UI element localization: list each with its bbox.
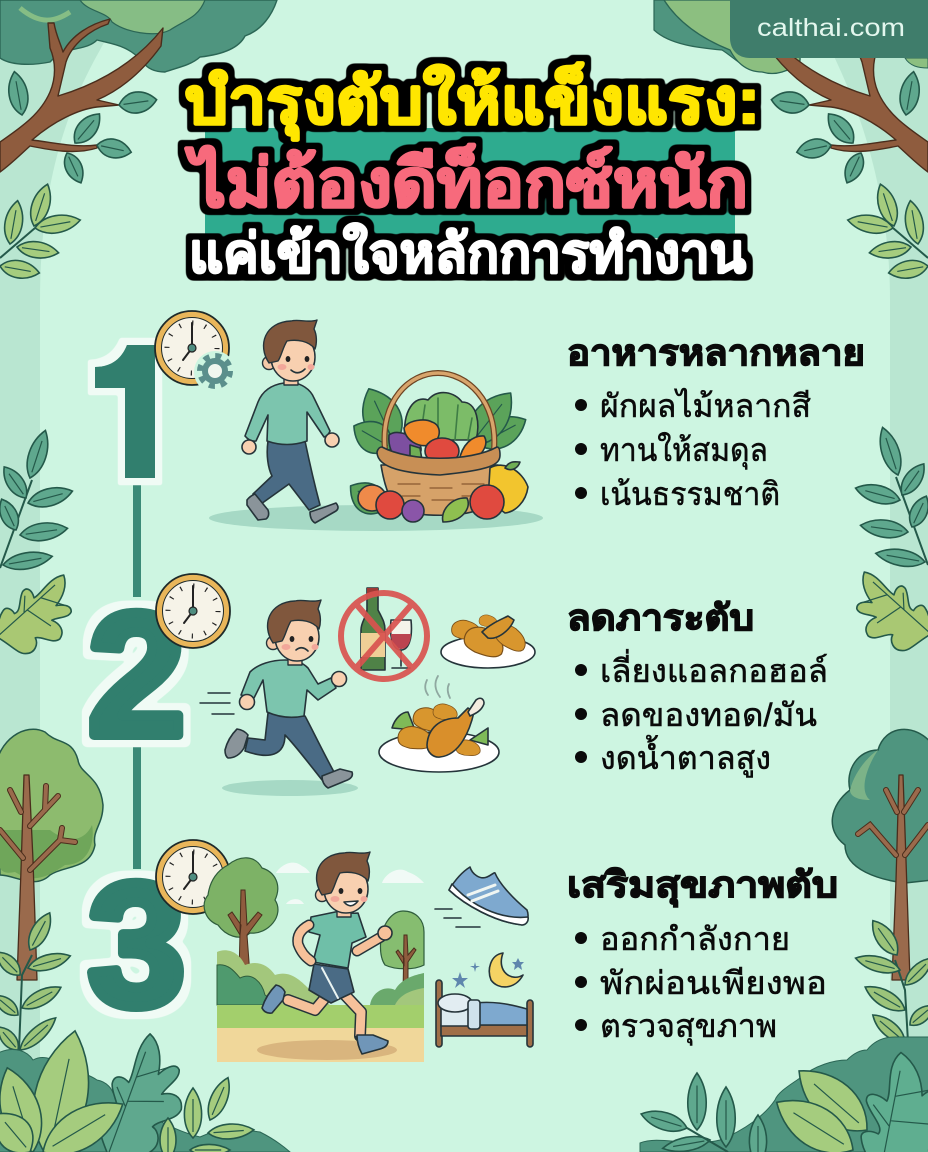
person running sad bbox=[200, 600, 358, 796]
ground shadow bbox=[222, 780, 358, 796]
right lower sprig bbox=[854, 916, 928, 1048]
icon: no alcohol bbox=[341, 588, 427, 679]
loose produce bbox=[358, 485, 386, 511]
tree left bbox=[204, 858, 278, 937]
icon: running shoe bbox=[435, 867, 528, 927]
vegetable basket bbox=[342, 373, 532, 522]
handle bbox=[384, 373, 494, 450]
right tree bbox=[832, 729, 928, 980]
wine bottle bbox=[361, 588, 385, 670]
bullet list: ทานให้สมดุล bbox=[600, 432, 768, 470]
section 3 text bbox=[567, 864, 838, 1046]
steam bbox=[425, 676, 450, 698]
top-right canopy bbox=[654, 0, 928, 74]
bullet list: ตรวจสุขภาพ bbox=[600, 1008, 777, 1046]
bullet list bbox=[575, 388, 811, 512]
basket body bbox=[381, 465, 498, 515]
bullet list: ผักผลไม้หลากสี bbox=[600, 388, 811, 424]
bushes bbox=[217, 950, 330, 1005]
title line 1: บำรุงตับให้แข็งแรง: bbox=[185, 63, 760, 141]
icon: clock with gear bbox=[155, 311, 236, 393]
left mid foliage bbox=[0, 428, 89, 665]
path bbox=[217, 1028, 424, 1062]
timeline connector bbox=[133, 485, 141, 869]
bullet list: ออกกำลังกาย bbox=[600, 921, 790, 957]
bullet list: พักผ่อนเพียงพอ bbox=[600, 965, 827, 1001]
title line 3: แค่เข้าใจหลักการทำงาน bbox=[189, 222, 746, 284]
person walking bbox=[242, 320, 339, 523]
bullet list bbox=[575, 649, 828, 778]
bullet list bbox=[575, 921, 827, 1046]
heading: เสริมสุขภาพตับ bbox=[567, 864, 838, 908]
heading: อาหารหลากหลาย bbox=[567, 332, 865, 373]
speed lines bbox=[200, 693, 234, 714]
icon: clock 2 bbox=[156, 574, 230, 648]
tree right bbox=[380, 911, 424, 969]
bottom-right foliage bbox=[639, 1037, 928, 1152]
bottom-left foliage bbox=[0, 1025, 290, 1152]
icon: clock 3 bbox=[156, 840, 230, 914]
section 1 text bbox=[567, 332, 865, 512]
bullet list: เลี่ยงแอลกอฮอล์ bbox=[600, 649, 828, 689]
title bbox=[185, 63, 760, 284]
website badge: calthai.com bbox=[757, 14, 905, 42]
park scene bbox=[204, 858, 424, 1062]
title backing panel bbox=[205, 128, 735, 238]
trunk bbox=[892, 775, 910, 980]
grass bbox=[217, 1005, 424, 1028]
left tree bbox=[0, 729, 103, 980]
step 3 number: 3 bbox=[88, 848, 185, 1043]
person jogging bbox=[262, 852, 392, 1054]
website badge bbox=[730, 0, 928, 58]
clouds bbox=[276, 863, 424, 904]
title line 2: ไม่ต้องดีท็อกซ์หนัก bbox=[185, 143, 748, 220]
plate of fried chicken top bbox=[441, 615, 535, 668]
bullet list: ลดของทอด/มัน bbox=[600, 697, 817, 733]
veg in basket bbox=[389, 432, 421, 460]
icon: moon and stars bbox=[452, 953, 524, 988]
bullet list: งดน้ำตาลสูง bbox=[600, 735, 771, 778]
wine glass bbox=[391, 620, 411, 668]
trunk bbox=[17, 775, 37, 980]
leafy greens bbox=[342, 381, 532, 522]
top-left branch and leaves bbox=[0, 19, 163, 281]
section 2 text bbox=[567, 597, 828, 778]
top-right branch and leaves bbox=[765, 19, 928, 281]
ground shadow step 1 bbox=[209, 505, 543, 531]
plate of fried chicken bottom bbox=[379, 676, 499, 772]
heading: ลดภาระตับ bbox=[567, 597, 754, 638]
left lower sprig bbox=[0, 909, 72, 1055]
step 1 number: 1 bbox=[78, 302, 186, 520]
top-left canopy bbox=[0, 0, 277, 72]
icon: bed bbox=[436, 980, 533, 1047]
right mid foliage bbox=[839, 425, 928, 662]
bullet list: เน้นธรรมชาติ bbox=[600, 476, 780, 512]
prohibition sign bbox=[341, 593, 427, 679]
step 2 number: 2 bbox=[88, 578, 185, 773]
